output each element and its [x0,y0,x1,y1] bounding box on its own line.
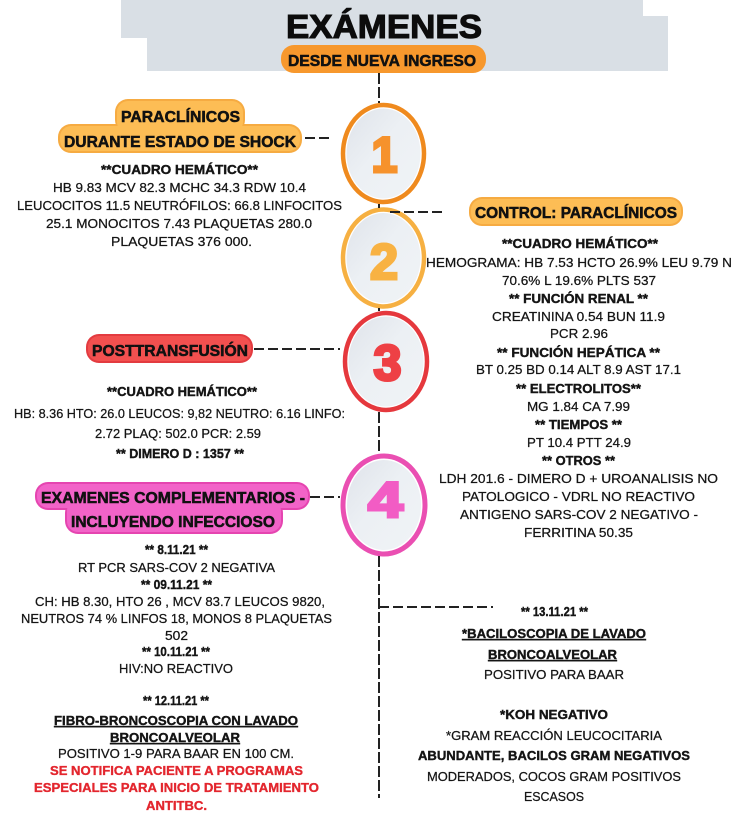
text block: FIBRO-BRONCOSCOPIA CON LAVADO [54,713,298,728]
heading pill [469,197,683,226]
text block: **CUADRO HEMÁTICO** [101,162,259,177]
text block: ANTIGENO SARS-COV 2 NEGATIVO - [460,507,698,522]
step 4 circle [343,456,425,554]
heading pill: EXAMENES COMPLEMENTARIOS - [41,490,305,507]
panel: baciloscopia results: BRONCOALVEOLAR [488,647,618,662]
panel: posttransfusion [14,334,345,461]
heading pill [86,334,253,363]
step 4 circle: 4 [368,472,403,528]
text block: POSITIVO 1-9 PARA BAAR EN 100 CM. [58,746,294,761]
text block: LDH 201.6 - DIMERO D + UROANALISIS NO [439,471,718,486]
panel: paraclinicos shock [17,99,342,249]
text block: 502 [165,628,188,643]
text block: ANTITBC. [146,798,207,813]
step 2 circle [343,210,424,306]
text block: CREATININA 0.54 BUN 11.9 [492,309,665,324]
panel: baciloscopia results: *GRAM REACCIÓN LEUCOCITARIA [446,728,662,743]
text block: ** OTROS ** [542,453,616,468]
connector lines [254,73,493,798]
heading pill [58,99,302,153]
text block: HB: 8.36 HTO: 26.0 LEUCOS: 9,82 NEUTRO: 6.16 LINFO: [14,406,345,421]
text block: 2.72 PLAQ: 502.0 PCR: 2.59 [95,426,261,441]
panel: examenes complementarios [21,482,332,813]
text block [14,384,345,461]
text block: **CUADRO HEMÁTICO** [107,384,258,399]
text block: ESPECIALES PARA INICIO DE TRATAMIENTO [34,780,319,795]
text block: 25.1 MONOCITOS 7.43 PLAQUETAS 280.0 [46,216,312,231]
text block [17,162,342,249]
text block: ** 10.11.21 ** [142,644,211,659]
step 3 circle [345,313,427,410]
text block: ** FUNCIÓN RENAL ** [509,291,649,306]
text block: LEUCOCITOS 11.5 NEUTRÓFILOS: 66.8 LINFOCITOS [17,198,342,213]
panel: baciloscopia results: POSITIVO PARA BAAR [484,667,624,682]
text block: PLAQUETAS 376 000. [111,234,252,249]
heading pill: CONTROL: PARACLÍNICOS [475,203,677,222]
step 3 circle: 3 [374,335,402,391]
panel: baciloscopia results: ABUNDANTE, BACILOS GRAM NEGATIVOS [418,748,690,763]
subtitle pill: DESDE NUEVA INGRESO [288,53,476,70]
panel: baciloscopia results: MODERADOS, COCOS GRAM POSITIVOS [427,769,681,784]
text block [426,236,732,540]
text block: ** FUNCIÓN HEPÁTICA ** [497,345,661,360]
heading pill: INCLUYENDO INFECCIOSO [71,514,275,531]
text block: ** DIMERO D : 1357 ** [116,446,245,461]
text block: BRONCOALVEOLAR [110,730,241,745]
heading pill: POSTTRANSFUSIÓN [92,341,248,360]
text block: **CUADRO HEMÁTICO** [502,236,659,251]
text block: PCR 2.96 [550,326,608,341]
text block: BT 0.25 BD 0.14 ALT 8.9 AST 17.1 [476,362,681,377]
panel: baciloscopia results: ** 13.11.21 ** [521,604,589,619]
text block: NEUTROS 74 % LINFOS 18, MONOS 8 PLAQUETAS [21,611,332,626]
text block [21,542,332,813]
header background [121,0,668,71]
text block: ** ELECTROLITOS** [516,381,642,396]
panel: baciloscopia results [418,604,690,804]
heading pill [35,482,310,534]
title: EXÁMENES [286,8,482,45]
text block: HIV:NO REACTIVO [119,661,233,676]
text block: RT PCR SARS-COV 2 NEGATIVA [78,560,275,575]
text block: PATOLOGICO - VDRL NO REACTIVO [462,489,695,504]
text block: ** TIEMPOS ** [535,417,623,432]
panel: baciloscopia results: *BACILOSCOPIA DE LAVADO [462,626,646,641]
panel: baciloscopia results: ESCASOS [524,789,584,804]
text block: 70.6% L 19.6% PLTS 537 [502,273,656,288]
step 2 circle: 2 [370,234,398,290]
text block: PT 10.4 PTT 24.9 [527,435,631,450]
text block: ** 8.11.21 ** [145,542,209,557]
text block: CH: HB 8.30, HTO 26 , MCV 83.7 LEUCOS 9820, [35,594,325,609]
panel: baciloscopia results: *KOH NEGATIVO [500,707,608,722]
text block: HB 9.83 MCV 82.3 MCHC 34.3 RDW 10.4 [53,180,306,195]
text block: FERRITINA 50.35 [524,525,633,540]
step 1 circle: 1 [372,127,398,183]
text block: ** 12.11.21 ** [143,693,210,708]
text block: MG 1.84 CA 7.99 [527,399,630,414]
text block: HEMOGRAMA: HB 7.53 HCTO 26.9% LEU 9.79 N [426,255,732,270]
panel: control paraclinicos [426,197,732,540]
step 1 circle [343,105,424,202]
subtitle pill [281,45,486,73]
text block: ** 09.11.21 ** [141,577,213,592]
heading pill: PARACLÍNICOS [121,107,240,126]
heading pill: DURANTE ESTADO DE SHOCK [64,134,296,151]
text block: SE NOTIFICA PACIENTE A PROGRAMAS [50,763,303,778]
